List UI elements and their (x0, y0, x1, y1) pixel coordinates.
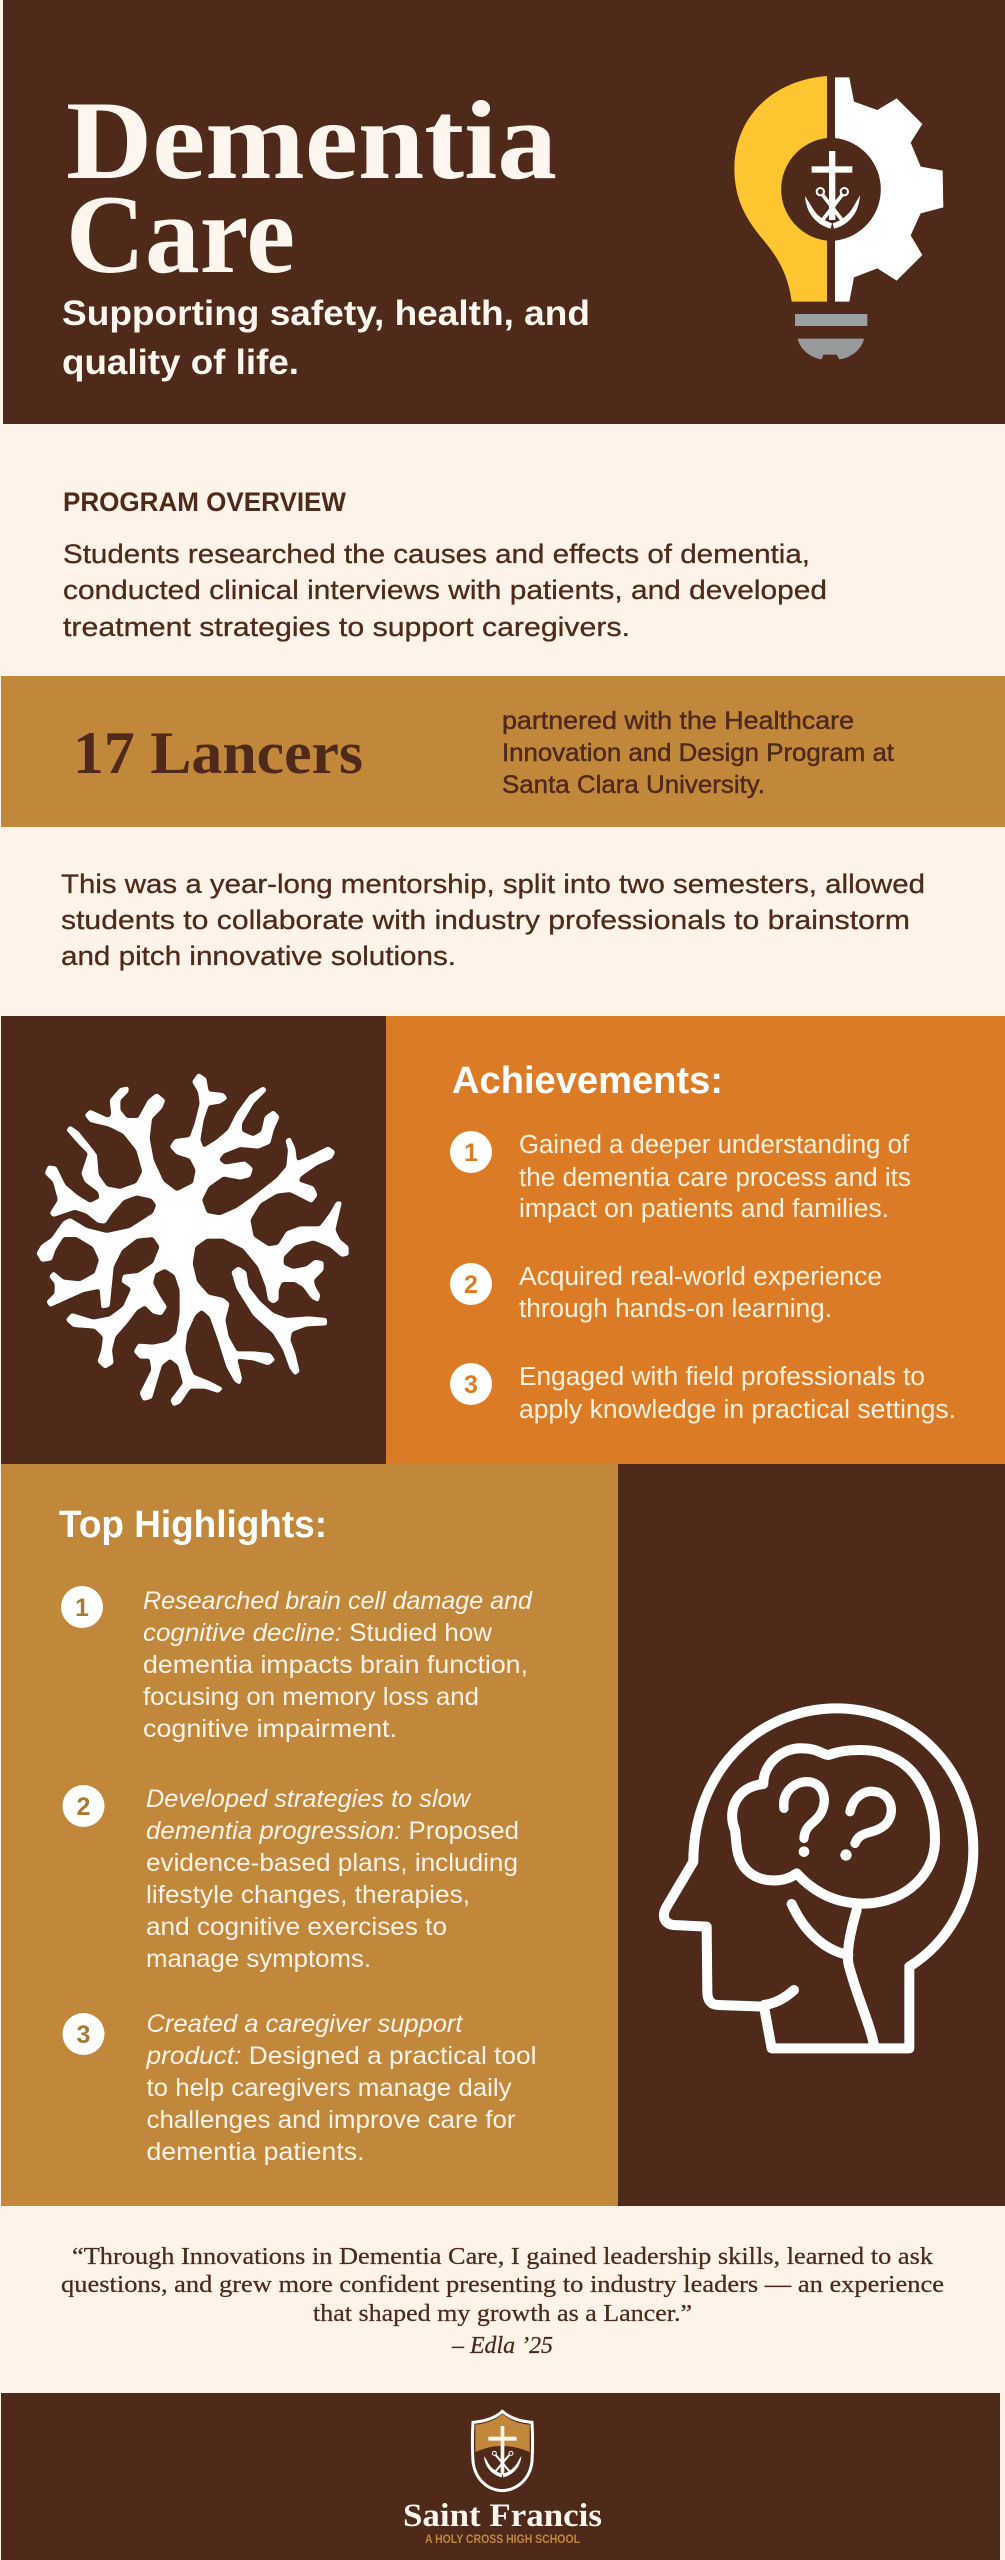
highlight 1: cognitive decline: Studied how (143, 1619, 493, 1647)
achievement 1: Gained a deeper understanding of (519, 1131, 910, 1159)
heading: program overview: PROGRAM OVERVIEW (63, 487, 346, 517)
achievement 1 (450, 1131, 911, 1223)
mentorship text: and pitch innovative solutions. (61, 941, 456, 971)
mentorship text: students to collaborate with industry professionals to brainstorm (61, 905, 910, 935)
overview text: conducted clinical interviews with patients, and developed (63, 575, 827, 605)
achievement 3: 3 (464, 1371, 478, 1399)
achievement 2: Acquired real-world experience (519, 1263, 882, 1291)
partnership text: partnered with the Healthcare (502, 707, 854, 735)
highlight 1: focusing on memory loss and (143, 1683, 479, 1711)
panel: header (3, 0, 1005, 424)
highlight 2: and cognitive exercises to (146, 1913, 447, 1941)
highlight 2: dementia progression: Proposed (146, 1817, 519, 1845)
highlight 2: 2 (77, 1793, 90, 1821)
highlight 2 (62, 1785, 519, 1973)
highlight 3: Created a caregiver support (146, 2010, 464, 2038)
achievement 2: 2 (464, 1271, 478, 1299)
highlight 3: to help caregivers manage daily (146, 2074, 512, 2102)
achievement 2: through hands-on learning. (519, 1295, 832, 1323)
highlight 3: dementia patients. (146, 2138, 364, 2166)
school tagline: A HOLY CROSS HIGH SCHOOL (425, 2532, 580, 2546)
subtitle: quality of life. (62, 343, 299, 382)
highlight 2: manage symptoms. (146, 1945, 371, 1973)
overview text: treatment strategies to support caregivers. (63, 612, 630, 642)
logo: school shield (472, 2411, 532, 2491)
panel: 17 Lancers band (1, 676, 1005, 827)
highlight 1: 1 (75, 1594, 89, 1622)
quote (61, 2244, 944, 2359)
overview text (63, 539, 827, 642)
panel: achievements (386, 1016, 1005, 1464)
achievement 3: apply knowledge in practical settings. (519, 1396, 956, 1424)
highlight 1 (61, 1586, 533, 1743)
quote: “Through Innovations in Dementia Care, I gained leadership skills, learned to ask (72, 2244, 933, 2270)
highlight 2: evidence-based plans, including (146, 1849, 518, 1877)
panel: top highlights (1, 1464, 619, 2206)
icon: light bulb and gear with anchor (734, 76, 943, 359)
achievement 3 (450, 1363, 956, 1424)
title: Care (66, 173, 295, 297)
achievement 3: Engaged with field professionals to (519, 1363, 925, 1391)
partnership text: Innovation and Design Program at (502, 739, 894, 767)
partnership text (502, 707, 894, 799)
panel: head illustration (618, 1464, 1005, 2206)
panel: program overview (63, 487, 827, 642)
highlight 2: lifestyle changes, therapies, (146, 1881, 470, 1909)
highlight 3: 3 (77, 2021, 90, 2049)
mentorship text: This was a year-long mentorship, split into two semesters, allowed (61, 869, 925, 899)
highlight 3: product: Designed a practical tool (145, 2042, 536, 2070)
stat: 17 Lancers: 17 Lancers (73, 720, 363, 786)
icon: head with question marks (664, 1708, 973, 2048)
achievement 1: impact on patients and families. (519, 1195, 889, 1223)
subtitle (62, 294, 590, 382)
highlight 3 (62, 2010, 536, 2166)
title (66, 79, 557, 297)
achievement 2 (450, 1263, 882, 1323)
panel: neuron (1, 1016, 387, 1464)
achievement 1: 1 (464, 1139, 478, 1167)
mentorship text (61, 869, 925, 971)
school name: Saint Francis (403, 2498, 602, 2534)
highlight 2: Developed strategies to slow (146, 1785, 472, 1813)
heading: achievements: Achievements: (452, 1060, 723, 1102)
highlight 1: Researched brain cell damage and (143, 1587, 533, 1615)
title: Dementia (66, 79, 557, 203)
achievement 1: the dementia care process and its (519, 1164, 911, 1192)
highlight 1: cognitive impairment. (143, 1715, 397, 1743)
icon: neuron (37, 1073, 348, 1406)
highlight 3: challenges and improve care for (146, 2106, 516, 2134)
quote: questions, and grew more confident presenting to industry leaders — an experience (61, 2272, 944, 2298)
panel: footer (1, 2393, 1000, 2560)
highlight 1: dementia impacts brain function, (143, 1651, 528, 1679)
subtitle: Supporting safety, health, and (62, 294, 590, 333)
quote: – Edla ’25 (451, 2333, 553, 2359)
partnership text: Santa Clara University. (502, 771, 765, 799)
overview text: Students researched the causes and effects of dementia, (63, 539, 810, 569)
quote: that shaped my growth as a Lancer.” (313, 2301, 692, 2327)
heading: top highlights: Top Highlights: (59, 1504, 327, 1546)
